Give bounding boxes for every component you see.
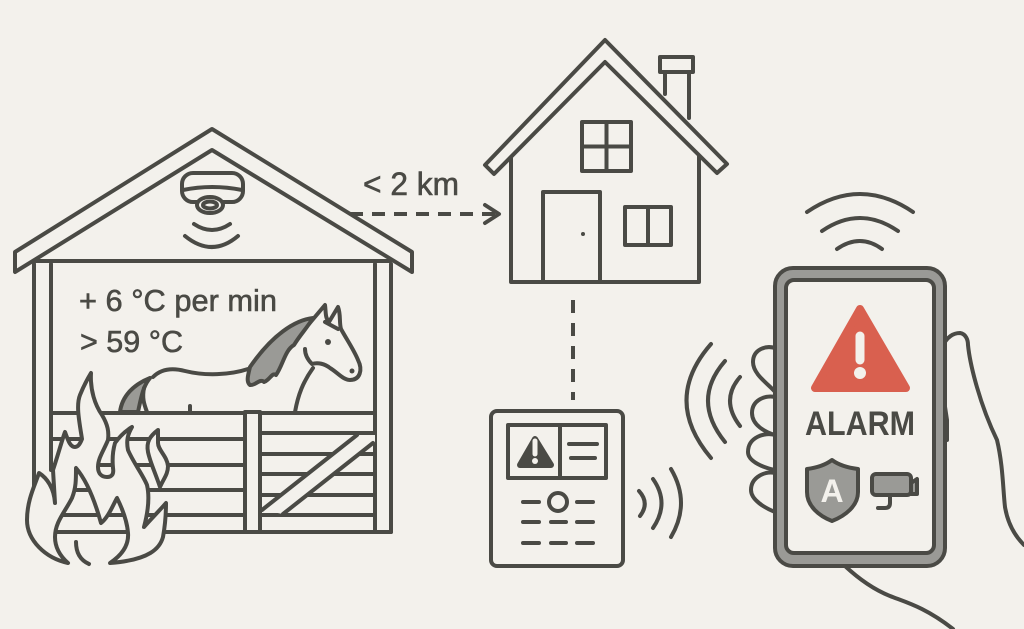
lower window (625, 207, 671, 245)
fence and gate (51, 412, 391, 532)
red warning triangle (815, 309, 906, 388)
shield icon (807, 460, 858, 521)
horse (120, 305, 360, 412)
alarm text: ALARM (805, 405, 915, 443)
dashed line house to panel (571, 300, 575, 400)
upper window (582, 122, 631, 171)
phone signal waves top (807, 194, 913, 249)
shield icon: A (820, 473, 844, 509)
alarm control panel (491, 411, 623, 566)
temperature threshold text: > 59 °C (80, 324, 183, 359)
camera icon (872, 474, 917, 508)
distance label: < 2 km (363, 166, 459, 202)
house walls (511, 148, 699, 282)
door (543, 192, 600, 282)
panel display (508, 425, 606, 478)
house roof (485, 40, 727, 174)
fire flames (27, 373, 168, 564)
panel controls (523, 493, 593, 543)
hand holding phone (748, 333, 1024, 629)
house (485, 40, 727, 282)
dashed arrow barn to house (350, 205, 499, 223)
smartphone (775, 268, 945, 566)
panel signal waves (639, 469, 681, 537)
barn structure (15, 129, 412, 532)
smoke detector with signal waves (182, 173, 243, 247)
chimney (660, 57, 693, 118)
phone signal waves left (686, 344, 740, 458)
barn with horse, fence and fire (15, 129, 412, 564)
temperature rate text: + 6 °C per min (79, 283, 277, 318)
